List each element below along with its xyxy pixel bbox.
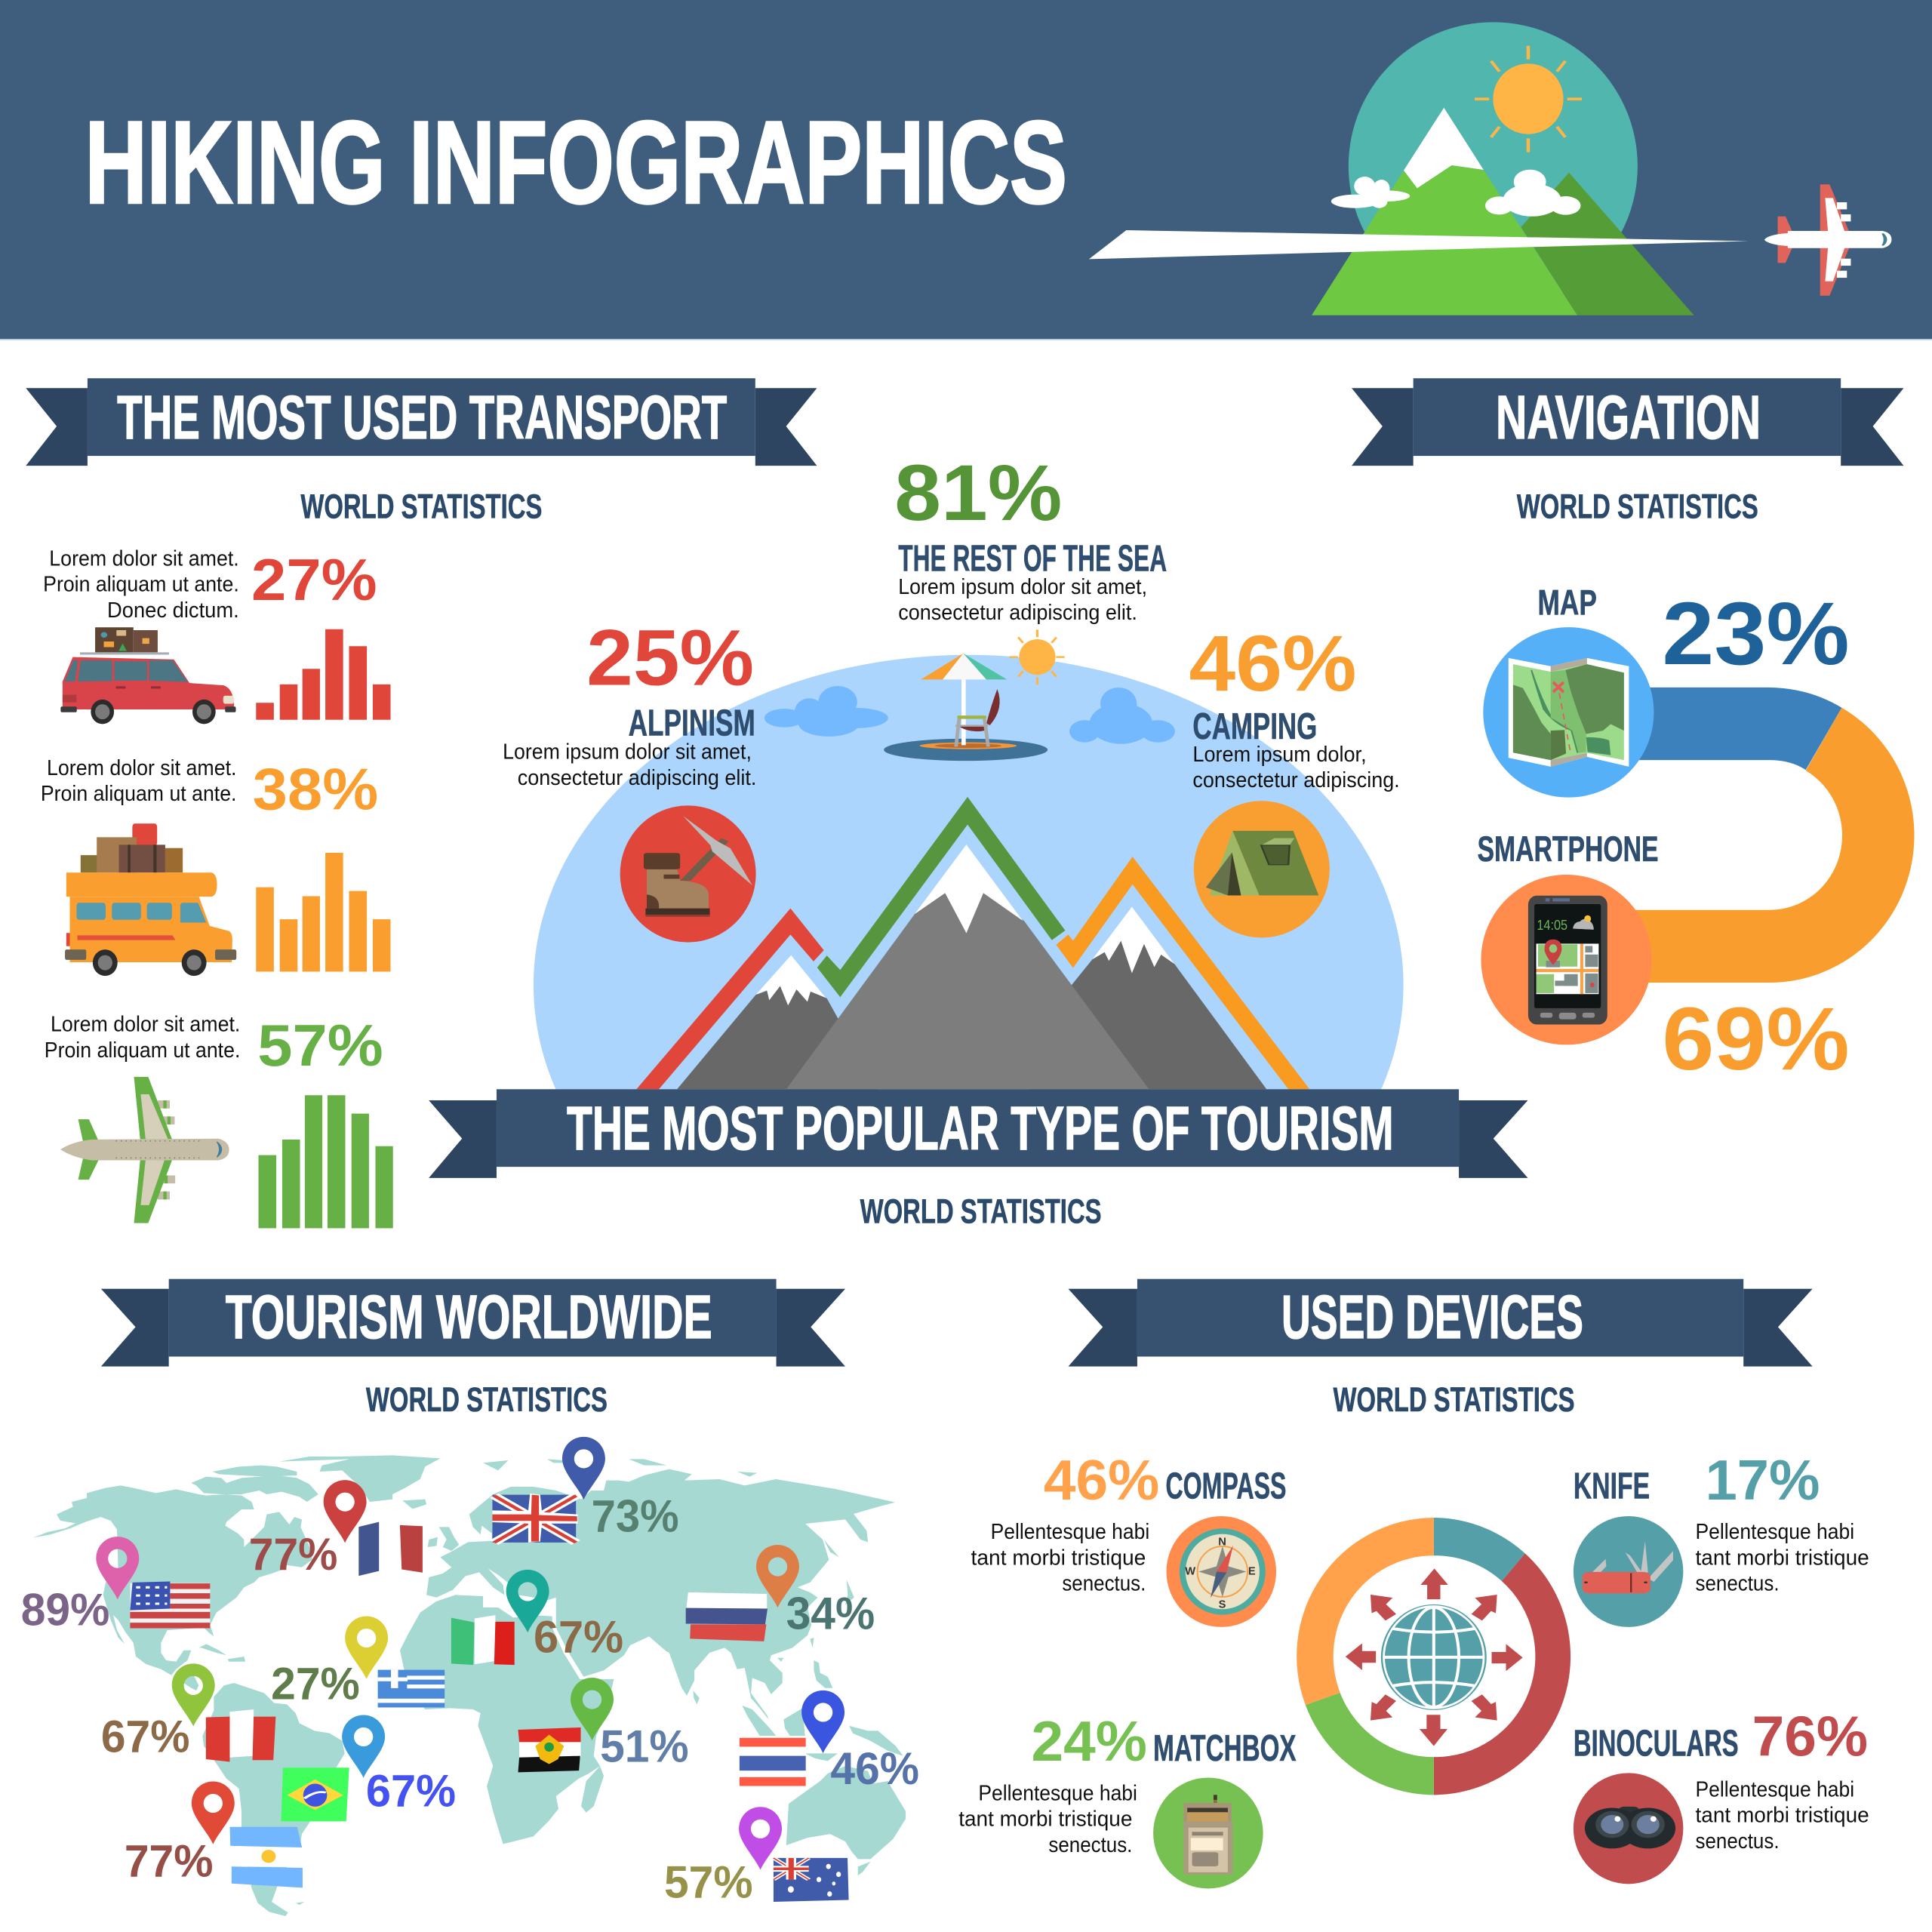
car text: Proin aliquam ut ante. (43, 573, 239, 597)
map percentages: 67% (534, 1611, 623, 1662)
map percentages: 89% (21, 1583, 109, 1635)
knife stat: tant morbi tristique (1696, 1546, 1869, 1570)
alpinism stat: Lorem ipsum dolor sit amet, (503, 740, 752, 764)
map percentages: 57% (664, 1856, 753, 1907)
alpinism stat: 25% (586, 614, 754, 703)
icon: matchbox (1153, 1778, 1263, 1888)
icon: globe (1382, 1605, 1486, 1709)
binoculars stat: tant morbi tristique (1696, 1804, 1869, 1828)
matchbox stat (958, 1709, 1297, 1857)
smartphone stat: SMARTPHONE (1478, 829, 1659, 869)
banner: the most used transport: THE MOST USED TRANSPORT (117, 383, 727, 452)
knife stat: 17% (1706, 1448, 1820, 1512)
panel: navigation (1478, 583, 1915, 1088)
path: sea green line (817, 797, 1065, 997)
knife stat (1574, 1448, 1869, 1596)
matchbox stat: Pellentesque habi (978, 1781, 1137, 1805)
compass stat: tant morbi tristique (971, 1546, 1146, 1570)
panel: used devices (958, 1448, 1869, 1888)
matchbox stat: MATCHBOX (1153, 1728, 1297, 1769)
knife stat: senectus. (1696, 1572, 1780, 1596)
path: alpinism red line (636, 909, 824, 1089)
binoculars stat: Pellentesque habi (1696, 1777, 1854, 1801)
icon: tent (1194, 801, 1330, 937)
map stat: 23% (1662, 584, 1850, 683)
bus percentage: 38% (253, 756, 378, 823)
sky dome (534, 655, 1404, 1089)
car percentage: 27% (251, 546, 377, 613)
flag: peru (206, 1709, 275, 1761)
icon: smartphone (1481, 875, 1652, 1044)
map percentages: 27% (271, 1657, 360, 1709)
camping stat: CAMPING (1192, 706, 1317, 747)
map percentages: 46% (830, 1743, 919, 1794)
car text (43, 546, 239, 623)
flag: russia (686, 1592, 768, 1641)
compass stat: Pellentesque habi (991, 1520, 1149, 1544)
alpinism stat: ALPINISM (629, 703, 755, 744)
band: smartphone orange (1634, 708, 1915, 983)
binoculars stat: 76% (1752, 1705, 1868, 1768)
plane text: Proin aliquam ut ante. (45, 1038, 240, 1063)
bus text: Proin aliquam ut ante. (41, 782, 236, 806)
icon: green airplane (60, 1077, 229, 1223)
map percentages: 67% (101, 1711, 189, 1762)
icon: orange bus with luggage (65, 823, 236, 976)
icon: clouds left (764, 686, 888, 737)
flag: argentina (229, 1827, 303, 1887)
transport graphics (60, 627, 393, 1228)
banner: used devices (1069, 1279, 1813, 1367)
alpinism stat (503, 614, 756, 790)
bus text: Lorem dolor sit amet. (47, 756, 236, 780)
flag: thailand (740, 1738, 806, 1786)
camping stat: Lorem ipsum dolor, (1192, 743, 1367, 767)
compass stat (971, 1448, 1286, 1596)
flag: egypt (518, 1727, 581, 1772)
icon: knife (1574, 1516, 1683, 1627)
bar chart: bus (256, 853, 391, 971)
flag: greece (378, 1670, 445, 1707)
map percentages: 73% (592, 1490, 679, 1541)
matchbox stat: tant morbi tristique (958, 1807, 1132, 1832)
map percentages: 34% (786, 1587, 875, 1638)
compass letters (1185, 1536, 1256, 1611)
banner: tourism worldwide: TOURISM WORLDWIDE (226, 1283, 712, 1352)
map stat: MAP (1538, 583, 1597, 623)
icon: sun (1475, 46, 1582, 152)
panel: world map with pins and flags (21, 1437, 919, 1916)
matchbox stat: senectus. (1048, 1833, 1132, 1857)
icon: smartphone: 14:05 (1537, 917, 1567, 933)
icon: binoculars (1574, 1773, 1683, 1884)
camping stat: 46% (1189, 620, 1357, 708)
sea stat: 81% (894, 449, 1062, 537)
compass stat: senectus. (1062, 1572, 1146, 1596)
title: HIKING INFOGRAPHICS (85, 97, 1067, 228)
donut chart (1297, 1518, 1571, 1795)
land: eurasia (426, 1469, 895, 1719)
icon: clouds right (1069, 688, 1175, 744)
icon: compass (1166, 1516, 1276, 1627)
icon: map (1483, 627, 1654, 798)
header panel (0, 0, 1932, 340)
bus text (41, 756, 236, 806)
mountains (677, 844, 1266, 1089)
flag: france (358, 1522, 423, 1576)
subheading: devices statistics: WORLD STATISTICS (1334, 1380, 1575, 1419)
flags and pins (96, 1437, 849, 1902)
subheading: transport world statistics: WORLD STATISTICS (300, 488, 542, 526)
contrail (1089, 230, 1749, 259)
flag: brazil (281, 1767, 349, 1821)
path: camping orange line (1056, 857, 1309, 1089)
map percentages: 67% (366, 1764, 456, 1816)
navigation graphics (1481, 627, 1915, 1044)
icon: clouds (1331, 170, 1580, 217)
land: australia (786, 1766, 906, 1859)
flag: italy (451, 1615, 515, 1665)
map percentages: 77% (249, 1528, 337, 1580)
compass stat: 46% (1044, 1448, 1159, 1512)
compass letters: E (1248, 1566, 1256, 1578)
header illustration: mountain, sun and plane (1089, 22, 1891, 315)
icon: airplane (1764, 184, 1891, 296)
plane text (45, 1013, 240, 1063)
panel: most popular type of tourism (429, 449, 1527, 1230)
center illustration (620, 629, 1330, 1089)
camping stat (1189, 620, 1400, 792)
banner: most popular type of tourism (429, 1089, 1527, 1178)
sea stat (894, 449, 1167, 625)
compass stat: COMPASS (1165, 1466, 1286, 1506)
plane percentage: 57% (257, 1012, 383, 1078)
sea stat: THE REST OF THE SEA (898, 539, 1167, 580)
binoculars stat: senectus. (1696, 1829, 1780, 1854)
binoculars stat (1574, 1705, 1869, 1854)
compass letters: N (1218, 1536, 1226, 1548)
icon: red car with luggage (60, 627, 235, 724)
plane text: Lorem dolor sit amet. (51, 1013, 240, 1037)
icon: sun small (1010, 629, 1065, 685)
flag: uk (492, 1494, 578, 1543)
sea stat: consectetur adipiscing elit. (898, 601, 1137, 625)
banner: navigation (1352, 378, 1903, 466)
map percentages: 77% (125, 1835, 213, 1887)
pins (96, 1437, 844, 1870)
binoculars stat: BINOCULARS (1574, 1724, 1739, 1764)
icon: mountains (1312, 108, 1694, 315)
alpinism stat: consectetur adipiscing elit. (518, 766, 756, 790)
map stat (1538, 583, 1850, 683)
banner: most popular type of tourism: THE MOST POPULAR TYPE OF TOURISM (567, 1094, 1394, 1163)
flag: usa (130, 1582, 210, 1629)
smartphone stat: 69% (1662, 989, 1850, 1088)
map percentages: 51% (600, 1721, 689, 1772)
subheading: navigation world statistics: WORLD STATISTICS (1517, 488, 1758, 526)
compass letters: S (1219, 1599, 1226, 1611)
land: africa (400, 1595, 614, 1844)
band: map blue (1634, 688, 1841, 770)
subheading: worldwide statistics: WORLD STATISTICS (366, 1380, 608, 1419)
land: south america (202, 1683, 345, 1916)
car text: Donec dictum. (107, 598, 239, 623)
matchbox stat: 24% (1032, 1709, 1147, 1773)
world map (33, 1455, 906, 1916)
panel: transport statistics (41, 546, 393, 1228)
map percentages (21, 1490, 919, 1907)
camping stat: consectetur adipiscing. (1192, 768, 1400, 792)
compass letters: W (1185, 1566, 1195, 1578)
sea stat: Lorem ipsum dolor sit amet, (898, 575, 1147, 599)
icon: alpinism (620, 805, 756, 943)
banner: the most used transport (26, 378, 817, 466)
banner: navigation: NAVIGATION (1496, 383, 1761, 452)
icon: island with umbrella and chair (884, 654, 1048, 761)
subheading: tourism world statistics: WORLD STATISTICS (860, 1192, 1102, 1230)
arrows (1346, 1568, 1523, 1746)
bar chart: plane (258, 1095, 393, 1228)
knife stat: KNIFE (1574, 1466, 1650, 1506)
knife stat: Pellentesque habi (1696, 1520, 1854, 1544)
banner: used devices: USED DEVICES (1281, 1283, 1583, 1352)
smartphone stat (1478, 829, 1850, 1088)
bar chart: car (256, 629, 391, 720)
car text: Lorem dolor sit amet. (49, 546, 239, 571)
flag: australia (774, 1858, 849, 1902)
banner: tourism worldwide (101, 1279, 845, 1367)
